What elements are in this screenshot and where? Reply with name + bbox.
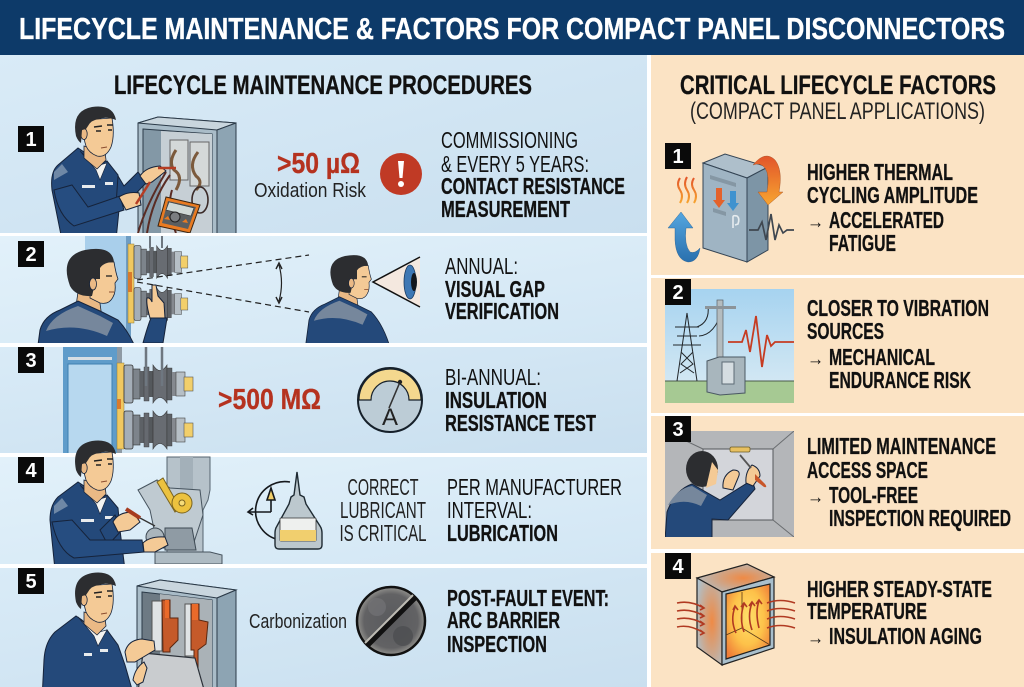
text: factor 4: [807, 576, 992, 649]
reading: 500 megaohm: >500 MΩ: [218, 384, 321, 416]
badge 3: 3: [25, 350, 37, 372]
text: step 4: [447, 474, 622, 546]
badge 3: 3: [672, 419, 684, 441]
badge 4: [665, 553, 691, 579]
text: step 2: [445, 253, 559, 324]
badge 1: 1: [25, 129, 37, 151]
row backgrounds: [651, 55, 1024, 687]
text: step 3: [445, 364, 596, 436]
illustration: technician inspecting arc barrier: [42, 573, 236, 687]
badge 2: 2: [672, 282, 684, 304]
step 4: lubrication: [18, 441, 622, 570]
factor 2: vibration: [665, 279, 989, 403]
step 1: contact resistance: [18, 107, 625, 240]
text: step 3: RESISTANCE TEST: [445, 410, 596, 436]
note: correct lubricant: IS CRITICAL: [340, 520, 427, 546]
illustration: worker in limited space: [665, 431, 794, 540]
illustration: tower, pole and panel: [665, 289, 794, 403]
text: factor 1: [807, 159, 978, 256]
text: step 1: & EVERY 5 YEARS:: [441, 151, 589, 177]
illustration: technician checking contact gap: [38, 236, 389, 343]
text: step 1: COMMISSIONING: [441, 127, 578, 153]
text: step 4: LUBRICATION: [447, 520, 558, 546]
badge 4: 4: [25, 460, 37, 482]
text: factor 4: TEMPERATURE: [807, 598, 927, 624]
step 5: arc barrier: [18, 568, 609, 687]
badge 1: [18, 126, 44, 152]
text: step 3: INSULATION: [445, 387, 547, 413]
text: step 5: INSPECTION: [447, 631, 547, 657]
heading: critical factors: [680, 70, 996, 125]
icon: oil bottle: [275, 472, 322, 549]
icon: carbonized barrier: [357, 587, 425, 655]
text: factor 1: HIGHER THERMAL: [807, 159, 953, 185]
text: step 5: POST-FAULT EVENT:: [447, 585, 609, 611]
icon: gauge: [358, 368, 422, 432]
text: factor 3: [807, 433, 1011, 531]
text: factor 2: SOURCES: [807, 318, 884, 344]
label: oxidation risk: Oxidation Risk: [254, 180, 367, 202]
panel: critical lifecycle factors: [651, 55, 1024, 687]
text: step 1: MEASUREMENT: [441, 196, 570, 222]
illustration: technician lubricating mechanism: [50, 441, 222, 570]
badge 4: [18, 457, 44, 483]
badge 5: [18, 568, 44, 594]
text: factor 3: →: [807, 487, 824, 508]
text: step 1: [441, 127, 625, 222]
text: step 5: [447, 585, 609, 657]
badge 5: 5: [25, 571, 37, 593]
badge 4: 4: [672, 556, 684, 578]
reading: 50 micro-ohm: >50 µΩ: [277, 148, 360, 180]
text: factor 3: TOOL-FREE: [829, 482, 918, 508]
factor 4: steady-state temperature: [665, 553, 992, 665]
illustration: disconnector: [63, 347, 193, 454]
heading: maintenance procedures: LIFECYCLE MAINTENANCE PROCEDURES: [114, 70, 532, 100]
badge 3: [18, 347, 44, 373]
note: correct lubricant: [340, 474, 427, 546]
gap sight lines: [137, 255, 309, 312]
factor 3: access space: [665, 416, 1011, 540]
badge 3: [665, 416, 691, 442]
icon: eye: [373, 257, 420, 307]
title bar: [0, 0, 1024, 55]
row backgrounds: [0, 55, 647, 687]
text: step 1: CONTACT RESISTANCE: [441, 173, 625, 199]
text: factor 2: MECHANICAL: [829, 344, 935, 370]
text: factor 3: ACCESS SPACE: [807, 457, 928, 483]
panel: lifecycle maintenance procedures: [0, 55, 647, 687]
step 3: insulation resistance: [18, 347, 596, 454]
text: factor 1: FATIGUE: [829, 230, 896, 256]
text: step 2: ANNUAL:: [445, 253, 518, 279]
badge 2: [665, 279, 691, 305]
text: factor 4: →: [807, 628, 824, 649]
text: step 5: ARC BARRIER: [447, 607, 560, 633]
badge 1: [665, 143, 691, 169]
text: factor 1: →: [807, 212, 824, 233]
badge 2: 2: [25, 244, 37, 266]
text: step 2: VERIFICATION: [445, 298, 559, 324]
note: correct lubricant: CORRECT: [348, 474, 418, 500]
text: step 2: VISUAL GAP: [445, 276, 545, 302]
icon: lubrication interval clock: [248, 482, 290, 540]
illustration: technician measuring panel: [52, 107, 236, 240]
badge 1: 1: [672, 146, 684, 168]
text: step 3: BI-ANNUAL:: [445, 364, 541, 390]
step 2: visual gap: [18, 236, 558, 343]
text: step 4: PER MANUFACTURER: [447, 474, 622, 500]
text: factor 1: ACCELERATED: [829, 207, 944, 233]
icon: gauge: A: [382, 404, 398, 431]
factor 1: thermal cycling: [665, 143, 978, 262]
icon: cabinet with thermal arrows: [668, 154, 794, 262]
text: factor 2: →: [807, 349, 824, 370]
badge 2: [18, 241, 44, 267]
text: step 4: INTERVAL:: [447, 497, 532, 523]
icon: hot enclosure: [677, 564, 795, 665]
text: factor 2: [807, 295, 989, 393]
label: carbonization: Carbonization: [249, 611, 347, 633]
icon: alert: [380, 153, 422, 195]
note: correct lubricant: LUBRICANT: [340, 497, 426, 523]
